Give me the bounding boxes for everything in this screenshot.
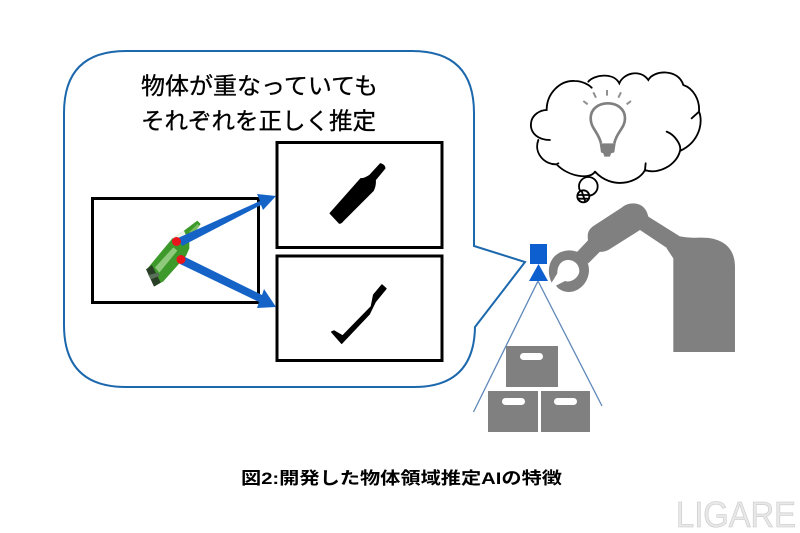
heading: bubble text: 物体が重なっていても — [141, 73, 378, 99]
icon: front bottle silhouette — [330, 164, 385, 223]
output box: front bottle — [277, 142, 442, 248]
caption: 図2:開発した物体領域推定AIの特徴 — [241, 469, 562, 488]
red point: front bottle — [172, 237, 181, 246]
robot base — [667, 236, 735, 352]
icon: blue camera — [529, 244, 548, 281]
heading: bubble text — [141, 73, 378, 134]
top box — [506, 346, 558, 387]
arrow: to front bottle — [178, 194, 276, 246]
input image box — [92, 198, 258, 302]
speech bubble panel — [64, 51, 525, 387]
icon: stacked boxes — [488, 346, 590, 432]
camera body — [530, 244, 547, 264]
icon: rear bottle partial silhouette — [332, 285, 386, 343]
bottom left box — [488, 391, 538, 432]
icon: light bulb — [583, 90, 631, 157]
thought bubble dots — [577, 177, 598, 202]
bottom right box — [541, 391, 590, 432]
robot wrist — [577, 240, 600, 263]
camera lens — [529, 264, 548, 281]
output box: rear bottle — [277, 256, 442, 360]
icon: overlapping green bottles — [146, 221, 201, 287]
robot gripper — [549, 250, 589, 292]
robot arm links — [588, 203, 686, 253]
arrow: to rear bottle — [180, 256, 276, 308]
icon: robot arm — [549, 203, 735, 352]
red point: rear bottle — [176, 255, 186, 264]
thought cloud — [531, 72, 701, 202]
heading: bubble text: それぞれを正しく推定 — [141, 108, 376, 134]
camera field of view — [474, 281, 602, 412]
